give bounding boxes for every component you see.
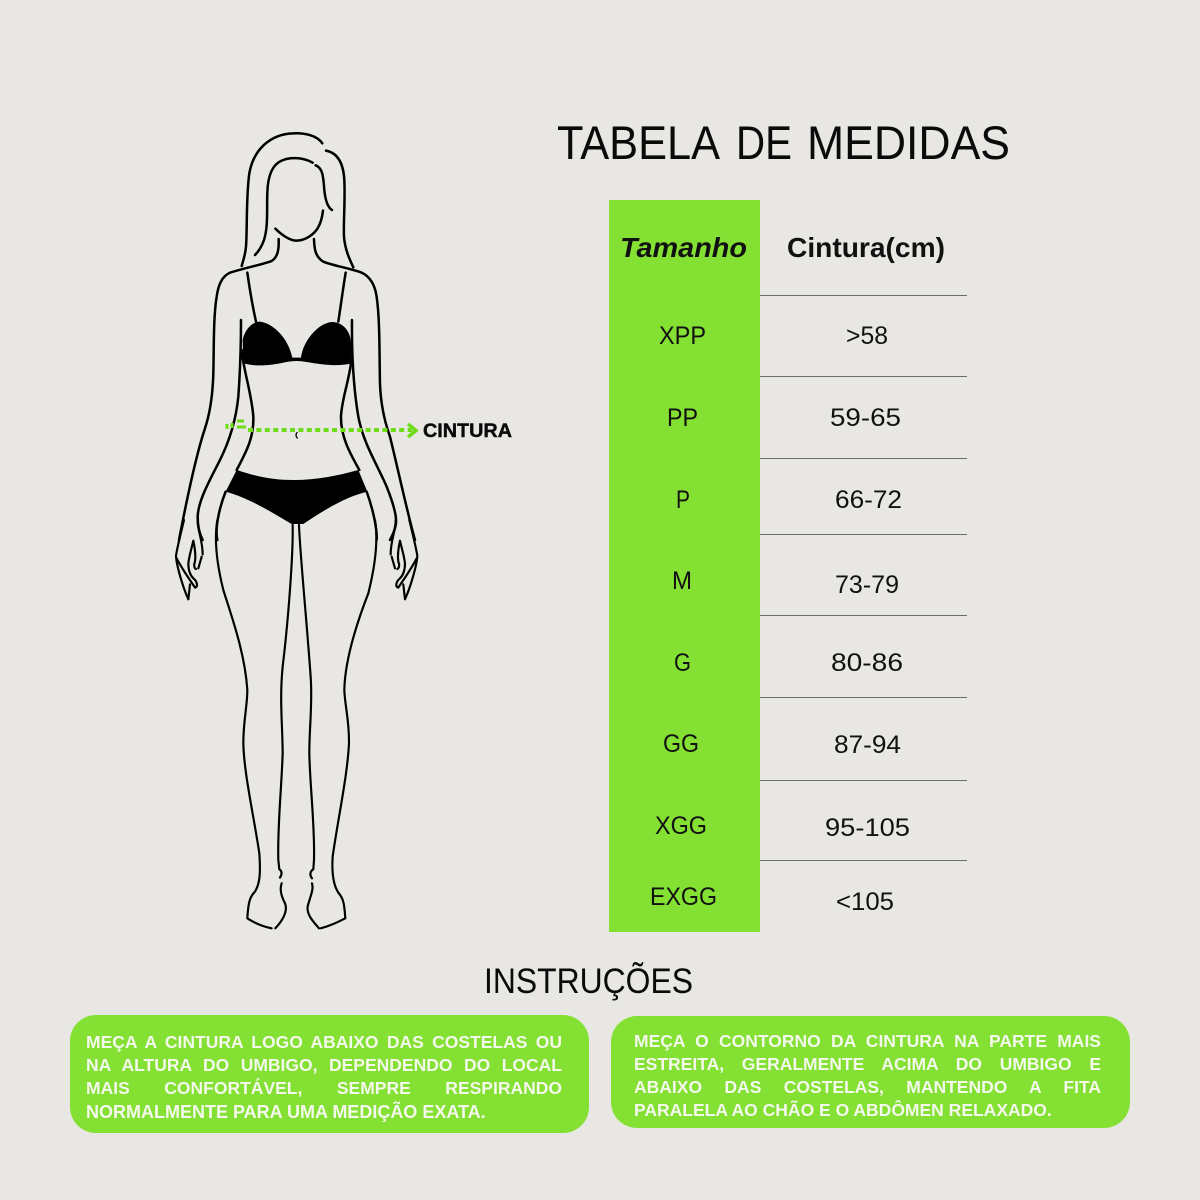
- panel: right instruction: ABAIXO DAS COSTELAS, MANTENDO A FITA: [634, 1077, 1101, 1097]
- table rows: 80-86: [831, 649, 903, 677]
- table rows: [650, 322, 910, 916]
- table rows: GG: [663, 730, 699, 758]
- panel: left instruction: MAIS CONFORTÁVEL, SEMPRE RESPIRANDO: [86, 1078, 562, 1098]
- table header: [620, 232, 945, 263]
- icon: bra: [243, 322, 352, 365]
- panel: left instruction: NA ALTURA DO UMBIGO, DEPENDENDO DO LOCAL: [86, 1055, 562, 1075]
- table header: Cintura(cm): [787, 232, 945, 263]
- table rows: 95-105: [825, 814, 910, 842]
- panel: right instruction: PARALELA AO CHÃO E O ABDÔMEN RELAXADO.: [634, 1100, 1052, 1120]
- panel: right instruction: [611, 1016, 1130, 1128]
- table rows: 59-65: [830, 404, 901, 432]
- panel: left instruction: [70, 1015, 589, 1133]
- title: MEDIDAS: [807, 116, 1010, 169]
- icon: underwear: [226, 470, 367, 524]
- table rows: 73-79: [835, 571, 899, 599]
- figure legs and hands outline: [176, 520, 417, 928]
- label: cintura: CINTURA: [423, 420, 512, 442]
- panel: right instruction: ESTREITA, GERALMENTE ACIMA DO UMBIGO E: [634, 1054, 1101, 1074]
- green size column: [609, 200, 760, 932]
- table rows: 66-72: [835, 486, 902, 514]
- table rows: <105: [836, 888, 894, 916]
- table rows: M: [672, 567, 692, 595]
- table rows: XGG: [655, 812, 707, 840]
- panel: right instruction: MEÇA O CONTORNO DA CINTURA NA PARTE MAIS: [634, 1031, 1101, 1051]
- table header: Tamanho: [620, 232, 747, 263]
- table rows: XPP: [659, 322, 706, 350]
- figure upper body outline: [179, 133, 415, 540]
- table rows: G: [674, 649, 691, 677]
- table rows: 87-94: [834, 731, 901, 759]
- panel: left instruction: MEÇA A CINTURA LOGO ABAIXO DAS COSTELAS OU: [86, 1032, 562, 1052]
- title: [557, 116, 1010, 169]
- size table: [609, 200, 967, 932]
- table rows: >58: [846, 322, 888, 350]
- table rows: P: [676, 486, 690, 514]
- table rows: EXGG: [650, 883, 717, 911]
- title: DE: [736, 116, 792, 169]
- instructions heading: INSTRUÇÕES: [484, 961, 693, 1001]
- table rows: PP: [667, 404, 698, 432]
- title: TABELA: [557, 116, 721, 169]
- arrow: waist measuring tape: [227, 421, 416, 437]
- body figure illustration: [176, 133, 417, 928]
- panel: left instruction: NORMALMENTE PARA UMA MEDIÇÃO EXATA.: [86, 1102, 486, 1122]
